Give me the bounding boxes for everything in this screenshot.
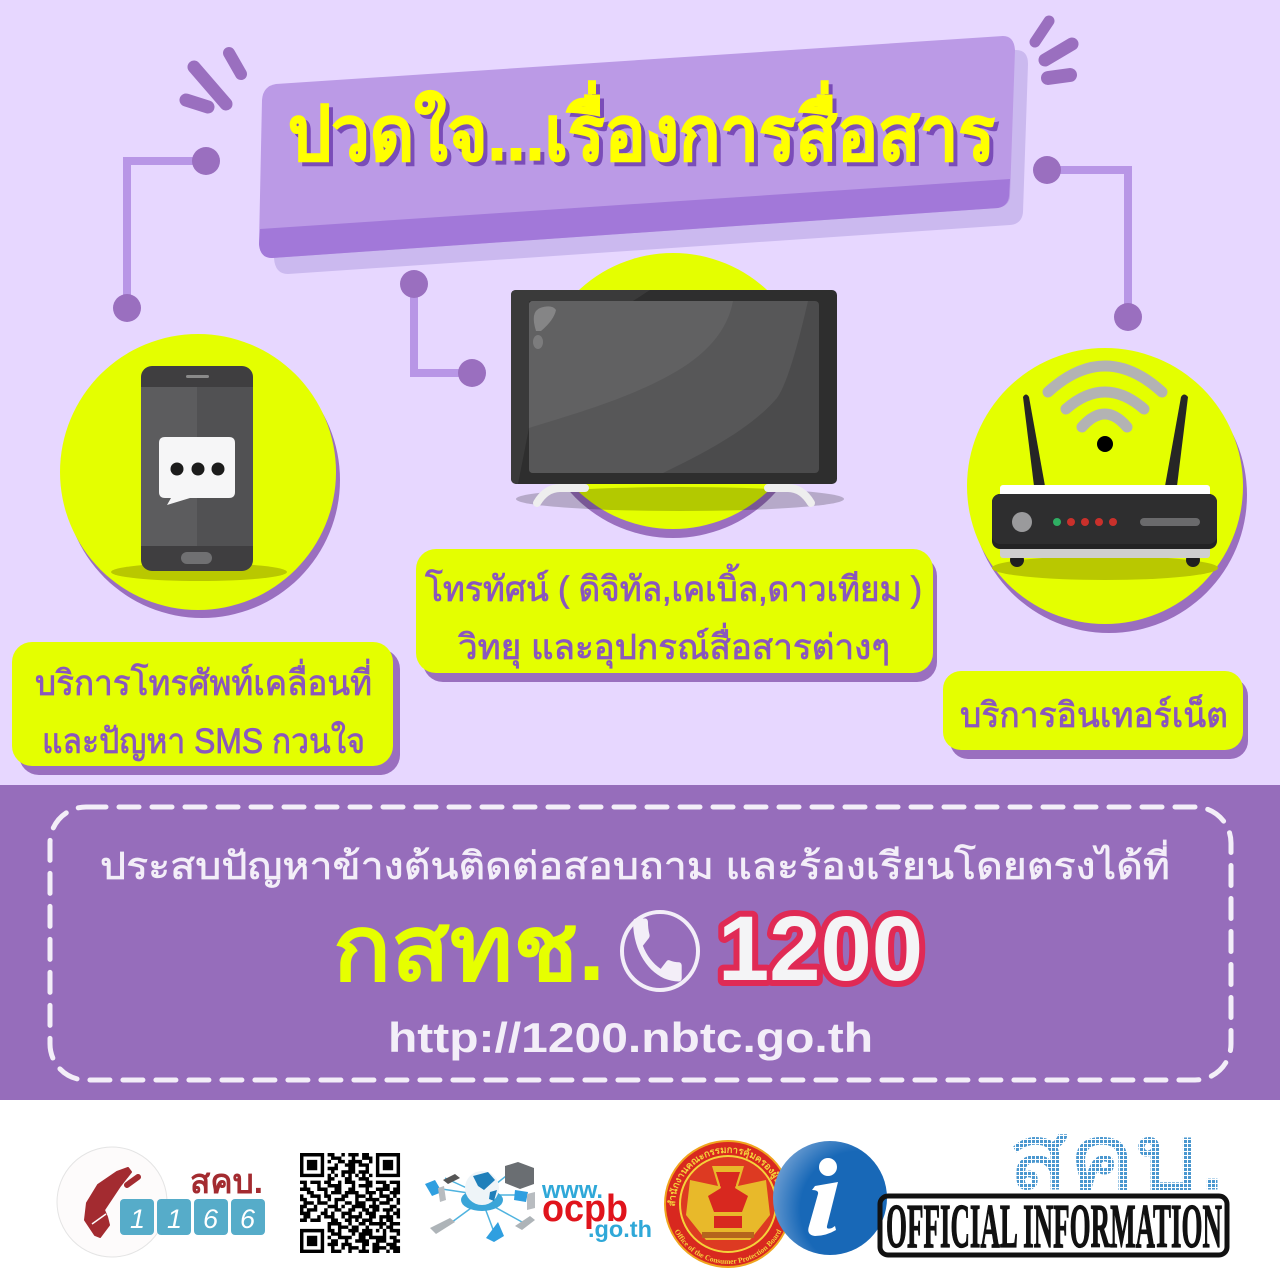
title: ปวดใจ...เรื่องการสื่อสาร [288, 80, 995, 177]
label box: television and radio: วิทยุ และอุปกรณ์สื่อสารต่างๆ [458, 623, 890, 668]
label box: mobile: บริการโทรศัพท์เคลื่อนที่ [35, 659, 372, 703]
hotline number: 1200 [718, 898, 923, 1000]
contact heading: ประสบปัญหาข้างต้นติดต่อสอบถาม และร้องเรียนโดยตรงได้ที่ [100, 840, 1170, 888]
burst marks: right [1035, 21, 1072, 78]
burst marks: left [186, 53, 241, 107]
label box: mobile: และปัญหา SMS กวนใจ [42, 721, 365, 761]
QR code [300, 1155, 400, 1251]
logo: info icon [773, 1141, 887, 1255]
connector: middle [400, 270, 486, 387]
logo: consumer protection board seal: Office of the Consumer Protection Board [675, 1229, 782, 1264]
logo: 1166 hotline: 1 [167, 1204, 182, 1234]
logo: ocpb network: ocpb [542, 1188, 628, 1230]
banner [259, 36, 1028, 274]
label box: television and radio: โทรทัศน์ ( ดิจิทัล,เคเบิ้ล,ดาวเทียม ) [425, 563, 922, 609]
logo: ocpb network [425, 1162, 652, 1242]
connector: right [1033, 156, 1142, 331]
footer background [0, 1100, 1280, 1280]
network devices [425, 1162, 535, 1242]
logo: official information: สคบ. [1008, 1107, 1226, 1209]
logo: 1166 hotline: 6 [240, 1204, 256, 1234]
logo: 1166 hotline: สคบ. [190, 1163, 263, 1201]
logo: 1166 hotline: 1 [130, 1204, 145, 1234]
website url: http://1200.nbtc.go.th [388, 1014, 873, 1061]
label box: mobile [12, 642, 400, 775]
logo: ocpb network: .go.th [588, 1216, 652, 1242]
connector: left [113, 147, 220, 322]
network spokes [435, 1165, 525, 1232]
logo: consumer protection board seal [664, 1140, 785, 1268]
logo: official information [880, 1107, 1227, 1261]
title: ปวดใจ...เรื่องการสื่อสาร [292, 84, 999, 181]
logo: 1166 hotline [57, 1147, 265, 1257]
label box: television and radio [416, 549, 937, 682]
label box: internet: บริการอินเทอร์เน็ต [960, 694, 1228, 735]
circle icon: television [511, 253, 844, 538]
panel: contact [0, 785, 1280, 1100]
icon: message bubble [159, 437, 235, 505]
agency name: กสทช. [333, 898, 605, 1000]
circle icon: mobile phone [60, 334, 340, 618]
circle icon: router [967, 348, 1247, 633]
label box: internet [943, 671, 1248, 759]
icon: wifi signal [1048, 366, 1162, 452]
logo: 1166 hotline: 6 [203, 1204, 219, 1234]
logo: ocpb network: www. [541, 1177, 603, 1204]
icon: telephone [622, 912, 698, 990]
logo: consumer protection board seal: สำนักงานคณะกรรมการคุ้มครองผู้บริโภค [667, 1147, 779, 1206]
